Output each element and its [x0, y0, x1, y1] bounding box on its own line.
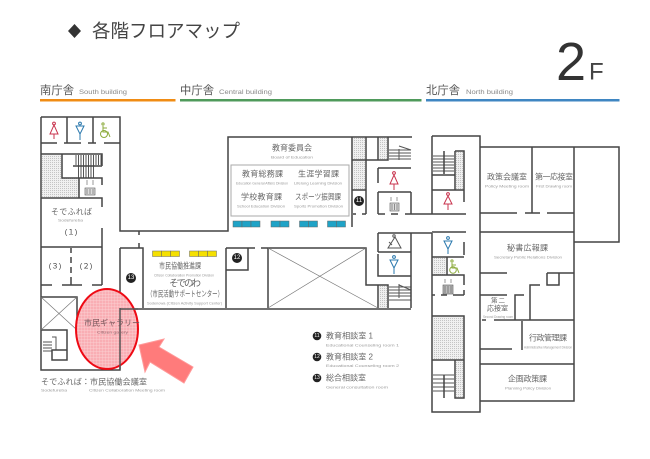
icon: women's toilet central — [390, 172, 398, 190]
legend: counseling rooms — [313, 330, 400, 390]
blue shelves — [233, 221, 346, 227]
floor number: F — [589, 58, 604, 86]
icon: men's toilet north — [444, 237, 452, 254]
room label: citizen collaboration: （市民活動サポートセンター） — [147, 288, 223, 298]
room labels: central divisions: 教育委員会 — [272, 142, 312, 152]
legend: counseling rooms: 教育相談室 1 — [326, 330, 374, 340]
building header: south: South building — [79, 90, 127, 96]
icon: wheelchair north — [450, 260, 459, 273]
building header: north: North building — [466, 90, 513, 96]
icon: multipurpose toilet — [388, 235, 401, 248]
building walls — [41, 117, 619, 412]
building header: central: 中庁舎 — [180, 84, 214, 97]
floor number — [556, 32, 604, 92]
room labels: central divisions: Education General Affairs Division — [236, 180, 288, 186]
building header: south — [40, 84, 176, 102]
legend: counseling rooms: 13 — [314, 375, 320, 381]
room labels: central divisions: 学校教育課 — [241, 192, 282, 202]
highlight: citizen gallery: Citizen gallery — [97, 330, 128, 334]
room labels: central divisions — [236, 142, 343, 208]
room label: sodefureba: Sodefureba — [58, 218, 84, 222]
building header: central: Central building — [219, 90, 272, 96]
yellow shelves — [152, 251, 216, 256]
hatched service areas — [42, 138, 464, 398]
stairs — [43, 146, 454, 391]
room labels: north building: First Drawing room — [536, 184, 573, 188]
room markers: 11 — [356, 198, 363, 204]
icon: women's toilet north — [444, 193, 452, 210]
room labels: north building: 秘書広報課 — [507, 242, 548, 252]
room labels: central divisions: Lifelong Learning Division — [294, 180, 342, 186]
sodefureba caption: Citizen Collaboration Meeting room — [89, 388, 166, 392]
room label: sodefureba: そでふれば — [51, 208, 92, 216]
legend: counseling rooms: Educational Counseling room 2 — [326, 363, 400, 368]
icon: men's toilet central — [390, 256, 398, 274]
icon: men's toilet south — [76, 122, 84, 140]
floor number: 2 — [556, 32, 586, 92]
room labels: north building: Planning Policy Division — [505, 386, 551, 390]
void crosses — [41, 248, 378, 330]
title: 各階フロアマップ — [92, 20, 240, 42]
room markers — [126, 196, 364, 283]
room labels: north building: Second Drawing room — [483, 314, 514, 319]
sodefureba caption: Sodefureba — [41, 388, 68, 392]
room labels: north building: 第一応接室 — [535, 172, 573, 182]
legend: counseling rooms: 教育相談室 2 — [326, 352, 374, 362]
building header: north — [426, 84, 620, 102]
icon: elevator north — [443, 279, 453, 294]
sodefureba caption — [41, 376, 166, 392]
room labels: north building: Administrative Management Division — [524, 344, 572, 350]
sodefureba caption: そでふれば：市民協働会議室 — [41, 376, 147, 386]
arrow pointing to citizen gallery — [139, 339, 193, 383]
room label: sodefureba: (２) — [80, 262, 93, 270]
room labels: central divisions: Sports Promotion Division — [294, 204, 343, 208]
room label: citizen collaboration: Citizen Collaboration Promotion Division — [154, 272, 214, 278]
room label: citizen collaboration: そでのわ — [169, 278, 201, 290]
icon: wheelchair south — [100, 123, 110, 138]
highlight: citizen gallery: 市民ギャラリー — [84, 318, 140, 328]
icon: elevator central — [390, 197, 399, 211]
legend: counseling rooms: 総合相談室 — [326, 372, 366, 382]
room labels: north building: Secretary Public Relations Division — [494, 254, 562, 260]
legend: counseling rooms: 12 — [314, 354, 320, 360]
legend: counseling rooms: Educational Counseling room 1 — [326, 342, 400, 348]
room labels: north building: Policy Meeting room — [485, 184, 530, 188]
icon: women's toilet south — [50, 122, 58, 139]
icon: elevator south — [85, 180, 95, 195]
room label: sodefureba — [49, 208, 93, 270]
room labels: north building: 行政管理課 — [529, 332, 567, 342]
room labels: central divisions: 生涯学習課 — [298, 168, 339, 178]
room labels: north building: 応接室 — [487, 304, 508, 312]
room markers: 12 — [234, 255, 241, 261]
building header: central — [180, 84, 422, 102]
legend: counseling rooms: 11 — [314, 333, 320, 339]
room label: sodefureba: (１) — [65, 228, 78, 236]
room labels: central divisions: スポーツ振興課 — [295, 192, 341, 202]
room labels: north building: 第二 — [491, 296, 506, 304]
room labels: north building: 企画政策課 — [508, 374, 547, 384]
room label: sodefureba: (３) — [49, 262, 62, 270]
panel: board of education divisions — [231, 165, 349, 216]
room labels: north building: 政策会議室 — [487, 172, 527, 182]
highlight: citizen gallery — [76, 289, 140, 369]
room markers: 13 — [128, 275, 135, 281]
room labels: central divisions: School Education Division — [237, 204, 285, 208]
room labels: central divisions: Board of Education — [271, 154, 313, 160]
legend: counseling rooms: General consultation room — [326, 384, 389, 390]
room label: citizen collaboration — [147, 260, 223, 306]
room labels: north building — [483, 172, 573, 390]
building header: south: 南庁舎 — [40, 84, 74, 97]
room label: citizen collaboration: Sodenowa (Citizen Activity Support Center) — [147, 300, 223, 306]
room label: citizen collaboration: 市民協働推進課 — [159, 260, 201, 270]
building header: north: 北庁舎 — [426, 84, 460, 97]
room labels: central divisions: 教育総務課 — [242, 168, 283, 178]
